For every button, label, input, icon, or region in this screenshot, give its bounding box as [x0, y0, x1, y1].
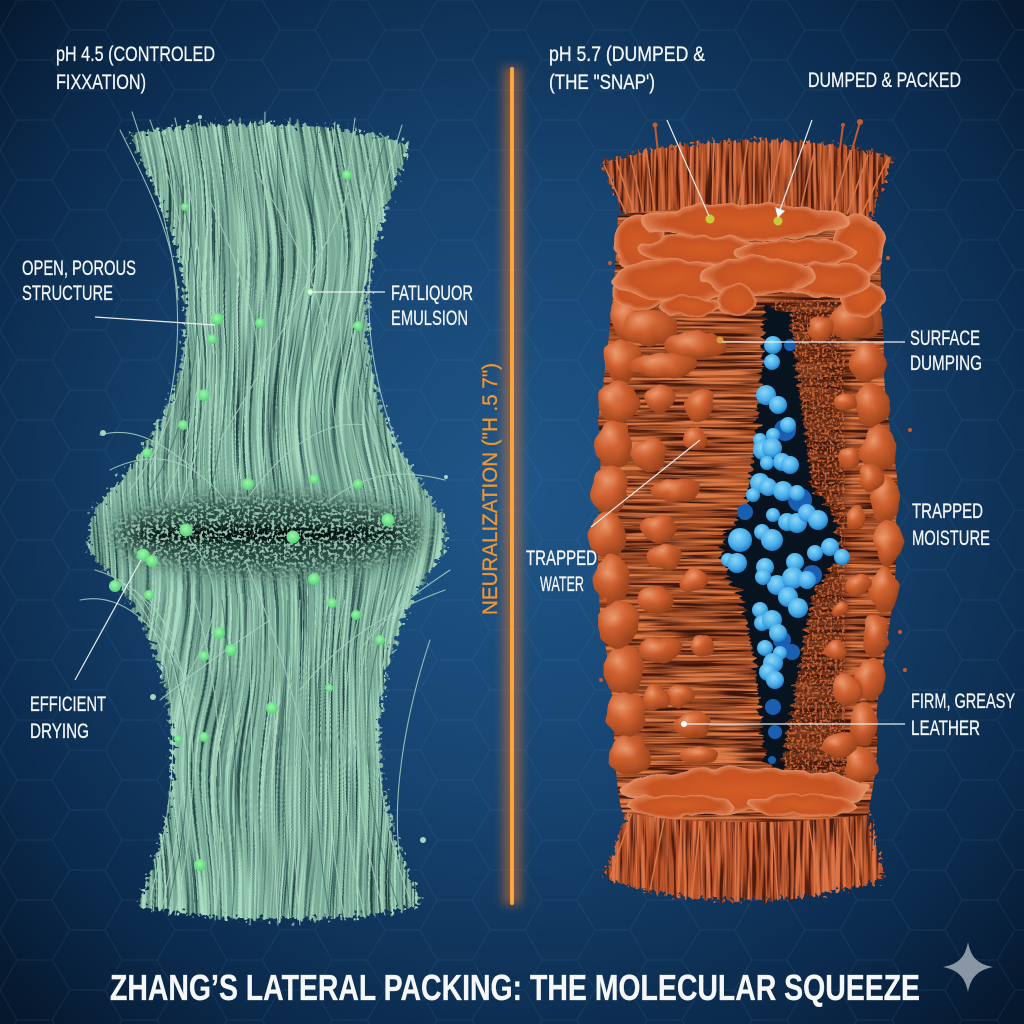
- icon: sparkle star: [943, 942, 993, 992]
- label: efficient drying: EFFICIENT: [30, 693, 106, 716]
- dark fibre gaps: [142, 125, 405, 920]
- label: dumped and packed: DUMPED & PACKED: [808, 69, 961, 92]
- label: trapped moisture: [912, 500, 990, 550]
- label: fatliquor emulsion: [391, 282, 473, 330]
- label: trapped moisture: TRAPPED: [912, 500, 983, 523]
- stray grease particles: [599, 256, 912, 682]
- central pH divider line: [503, 67, 521, 905]
- label: fatliquor emulsion: FATLIQUOR: [391, 282, 473, 305]
- bottom fringe fibres: [602, 810, 888, 906]
- heading: pH 5.7: (THE "SNAP'): [549, 71, 655, 94]
- fatliquor emulsion droplets: [109, 170, 394, 871]
- label: open porous structure: STRUCTURE: [22, 282, 113, 305]
- label: surface dumping: SURFACE: [910, 327, 980, 350]
- panel: pH 5.7 orange packed bundle: [585, 119, 912, 915]
- label: efficient drying: [30, 693, 106, 743]
- heading: pH 4.5: FIXXATION): [56, 71, 146, 94]
- label: surface dumping: DUMPING: [910, 352, 982, 375]
- heading: pH 4.5: pH 4.5 (CONTROLED: [56, 43, 215, 66]
- top fringe fibres: [600, 119, 896, 219]
- panel: pH 4.5 green fibre bundle: [80, 111, 450, 926]
- fibre bundle body: [84, 118, 450, 926]
- label: open porous structure: [22, 257, 136, 305]
- loose curved fibres: [80, 112, 450, 925]
- label: trapped water: WATER: [540, 573, 584, 596]
- label: firm greasy leather: [911, 690, 1015, 740]
- label: trapped water: TRAPPED: [526, 547, 597, 570]
- heading: pH 4.5: [56, 43, 215, 94]
- leader lines: [75, 120, 905, 726]
- label: trapped moisture: MOISTURE: [912, 527, 990, 550]
- label: surface dumping: [910, 327, 982, 375]
- vertical label: neutralization: NEURALIZATION ("H .5 7"): [479, 363, 502, 615]
- layered fibre body: [598, 209, 898, 822]
- label: open porous structure: OPEN, POROUS: [22, 257, 136, 280]
- heading: pH 5.7: pH 5.7 (DUMPED &: [549, 43, 705, 66]
- surface dumping markers: [706, 214, 782, 344]
- label: trapped water: [526, 547, 597, 596]
- stray fibre tips: [100, 115, 448, 843]
- label: efficient drying: DRYING: [30, 720, 89, 743]
- grease lumps and surface bands: [590, 204, 902, 818]
- label: firm greasy leather: LEATHER: [911, 717, 980, 740]
- heading: pH 5.7: [549, 43, 705, 94]
- trapped water cleft: [721, 305, 850, 772]
- label: fatliquor emulsion: EMULSION: [391, 307, 468, 330]
